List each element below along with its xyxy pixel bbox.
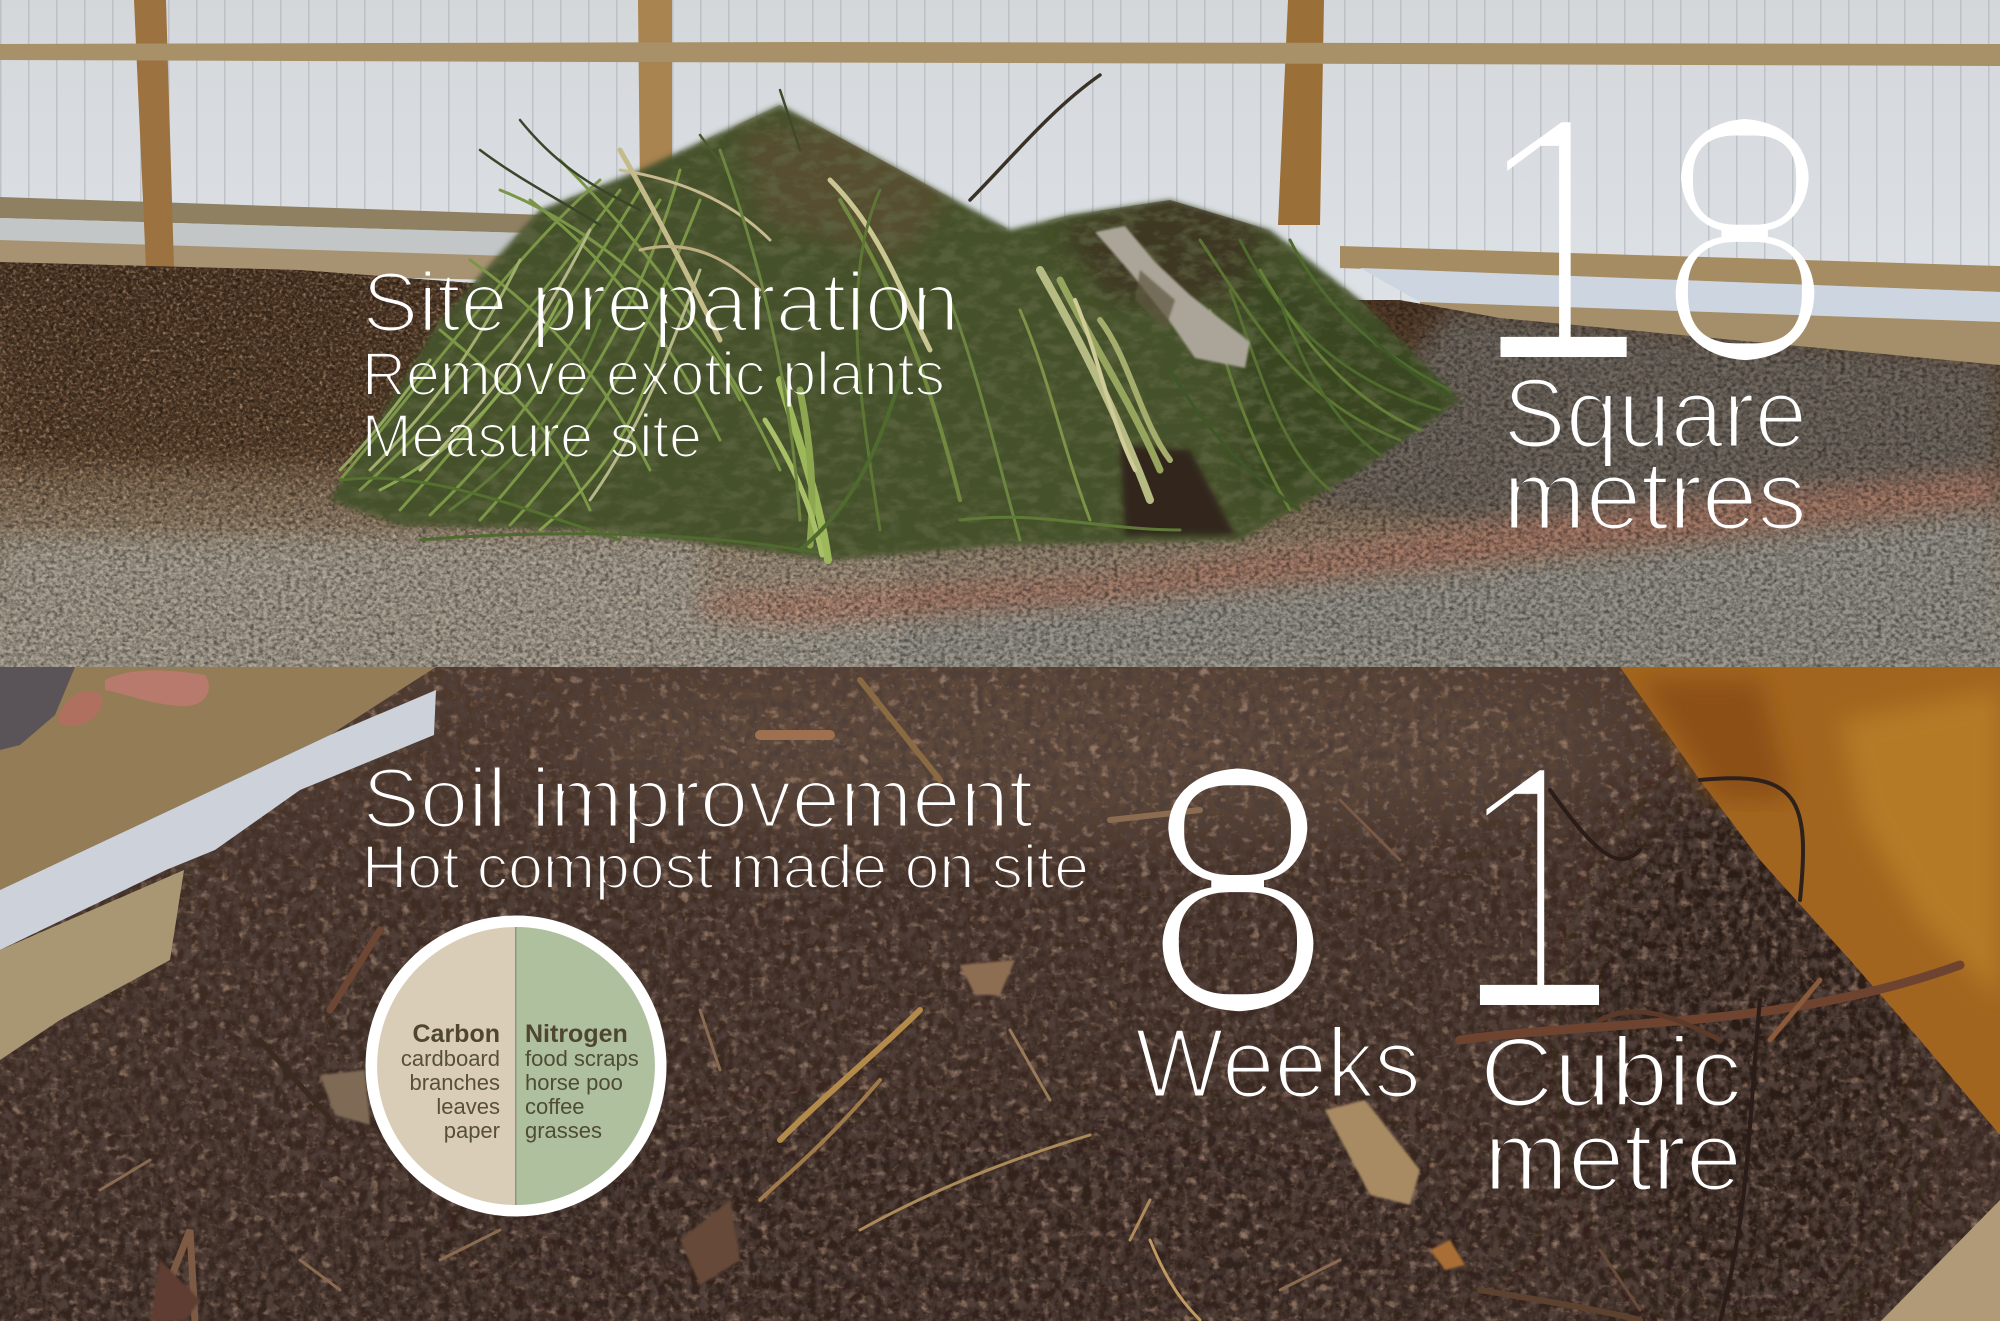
text block: site preparation tasks: Remove exotic plants (362, 340, 945, 408)
nitrogen list: coffee (525, 1094, 585, 1119)
statistic: 18 square metres (1466, 44, 1838, 550)
text block: hot compost: Hot compost made on site (362, 833, 1089, 901)
left timber boards (0, 667, 436, 1060)
grey debris in pile (1095, 226, 1250, 368)
carbon list: Carbon (412, 1020, 500, 1048)
text block: site preparation tasks (362, 340, 945, 470)
nitrogen list: food scraps (525, 1046, 639, 1071)
label: square metres (1503, 358, 1807, 550)
nitrogen list: Nitrogen (525, 1020, 628, 1048)
right orange timber (1620, 667, 2000, 1321)
twigs and debris (100, 680, 1960, 1321)
grass blades: left fan (340, 90, 830, 555)
number 8: 8 (1139, 692, 1337, 1086)
nitrogen list: grasses (525, 1118, 602, 1143)
leaf fragments (150, 960, 1465, 1321)
photo: site with cut grass pile (0, 0, 2000, 667)
statistic: 8 weeks (1135, 692, 1421, 1118)
text block: site preparation tasks: Measure site (362, 402, 702, 470)
nitrogen list: horse poo (525, 1070, 623, 1095)
heading: site preparation: Site preparation (362, 255, 959, 349)
label: cubic metre: Cubic (1480, 1017, 1742, 1127)
heading: soil improvement: Soil improvement (362, 751, 1033, 845)
grass blades: right fan (960, 240, 1450, 530)
carbon list: leaves (436, 1094, 500, 1119)
label: weeks: Weeks (1135, 1008, 1421, 1118)
label: square metres: metres (1503, 440, 1807, 550)
label: square metres: Square (1503, 358, 1807, 468)
carbon list: branches (409, 1070, 500, 1095)
number 18: 18 (1466, 44, 1838, 435)
label: cubic metre (1480, 1017, 1742, 1211)
statistic: 1 cubic metre (1444, 692, 1742, 1211)
fence posts and rails (0, 0, 2000, 370)
carbon list (401, 1020, 500, 1143)
grass blades: centre tufts (720, 75, 1170, 560)
nitrogen list (525, 1020, 639, 1143)
grass pile (320, 75, 1470, 570)
circle diagram: carbon and nitrogen (366, 916, 666, 1216)
ground (0, 262, 2000, 667)
wall panels (0, 0, 2000, 322)
compost base (0, 650, 2000, 1321)
label: cubic metre: metre (1484, 1101, 1742, 1211)
carbon list: cardboard (401, 1046, 500, 1071)
carbon list: paper (444, 1118, 500, 1143)
number 1: 1 (1444, 692, 1626, 1083)
photo: compost heap (0, 650, 2000, 1321)
